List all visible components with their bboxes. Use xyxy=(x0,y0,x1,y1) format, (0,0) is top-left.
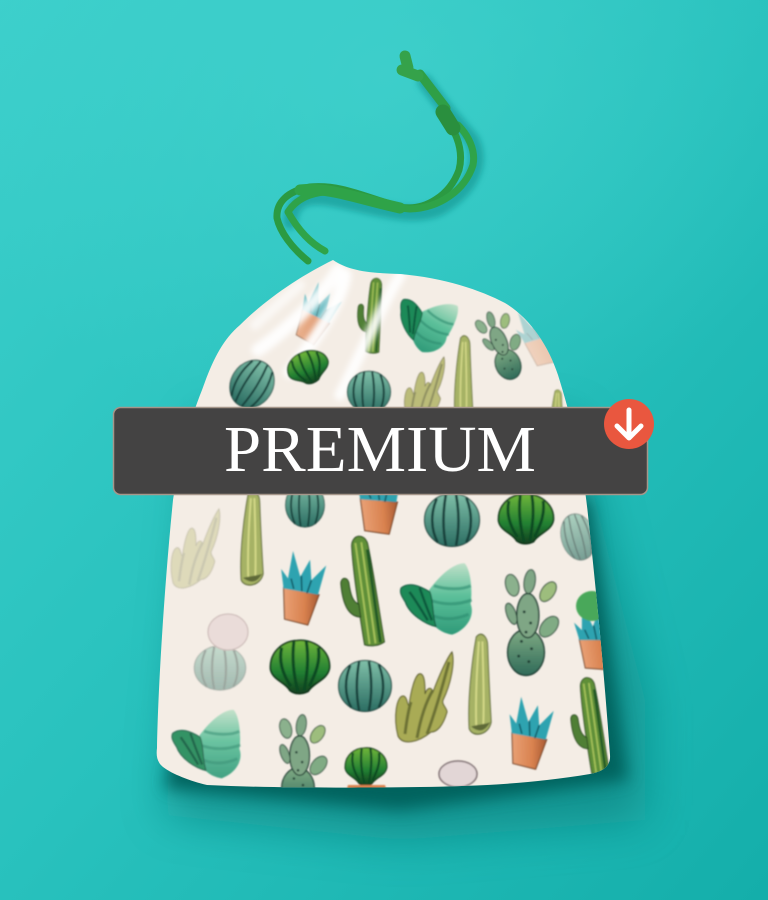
drawstring cord xyxy=(277,56,476,261)
cactus pattern, fifth row xyxy=(194,614,609,777)
bag shadow xyxy=(165,420,645,840)
cactus pattern, bottom row xyxy=(170,709,479,788)
drawstring bag xyxy=(157,260,623,809)
banner title: PREMIUM xyxy=(224,413,536,486)
cactus pattern, upper row xyxy=(291,277,569,385)
icon: download badge xyxy=(604,399,654,449)
cactus pattern, second row xyxy=(228,334,564,407)
cord shadow xyxy=(290,82,476,222)
gathered fabric folds xyxy=(255,270,400,395)
cactus pattern, third row xyxy=(170,495,592,590)
cactus pattern, fourth row xyxy=(279,535,623,675)
premium banner xyxy=(114,408,648,494)
